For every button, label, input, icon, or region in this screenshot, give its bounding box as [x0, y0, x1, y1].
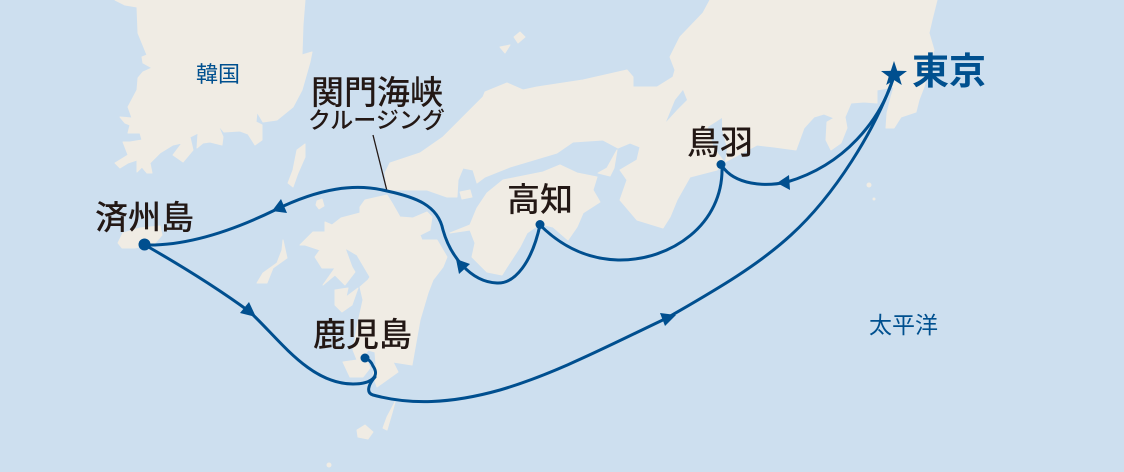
- land: Kyushu: [300, 195, 447, 387]
- route: Toba to Kochi: [540, 166, 722, 260]
- land: Jeju: [118, 226, 162, 248]
- label: Tokyo: 東京: [912, 51, 986, 92]
- water: Lake Biwa and Ise Bay: [666, 90, 727, 162]
- land: Seto islands: [460, 190, 472, 199]
- marker: Jeju: [138, 238, 150, 250]
- port markers: [138, 61, 907, 362]
- route: Tokyo to Toba: [722, 79, 893, 184]
- land: Tokara: [327, 463, 331, 467]
- land: Goto islands: [257, 240, 287, 283]
- marker: Tokyo star: [881, 61, 907, 85]
- marker: Kochi: [536, 220, 544, 229]
- route: Kagoshima to Tokyo: [369, 79, 893, 402]
- label: Korea: 韓国: [196, 62, 240, 87]
- land: Awaji: [598, 150, 617, 176]
- route lines: [145, 79, 893, 402]
- route: Jeju to Kagoshima: [145, 245, 376, 384]
- label: Toba: 鳥羽: [687, 124, 753, 161]
- marker: Kagoshima: [360, 354, 370, 362]
- label: Pacific Ocean: 太平洋: [869, 312, 938, 338]
- arrow: toward Kagoshima: [240, 302, 256, 317]
- land: Yakushima: [357, 425, 373, 439]
- land: Korean peninsula: [115, 0, 312, 173]
- arrowheads: [240, 175, 790, 326]
- label: Kochi: 高知: [507, 181, 573, 218]
- land: Oki: [514, 32, 525, 43]
- land: Honshu: [385, 0, 937, 228]
- arrow: toward Tokyo: [660, 313, 676, 326]
- route: Kochi to Kanmon to Jeju: [145, 187, 540, 283]
- land: Tanegashima: [383, 402, 395, 430]
- label: Kanmon cruising: クルージング: [308, 107, 445, 133]
- land: Izu islands: [867, 183, 871, 187]
- arrow: toward Kanmon: [456, 259, 470, 274]
- map: land masses: [115, 0, 937, 467]
- label: Kagoshima: 鹿児島: [313, 316, 412, 353]
- arrow: toward Jeju: [272, 199, 287, 213]
- marker: Toba: [716, 160, 726, 169]
- label: Kanmon Strait: 関門海峡: [311, 74, 443, 111]
- arrow: toward Toba: [777, 175, 790, 190]
- land: Amakusa: [335, 288, 358, 312]
- land: Shikoku: [450, 165, 600, 275]
- land: Tsushima: [288, 144, 305, 187]
- leader line: Kanmon Strait: [373, 135, 387, 191]
- label: Jeju: 済州島: [95, 199, 194, 236]
- land: Iki: [316, 199, 324, 209]
